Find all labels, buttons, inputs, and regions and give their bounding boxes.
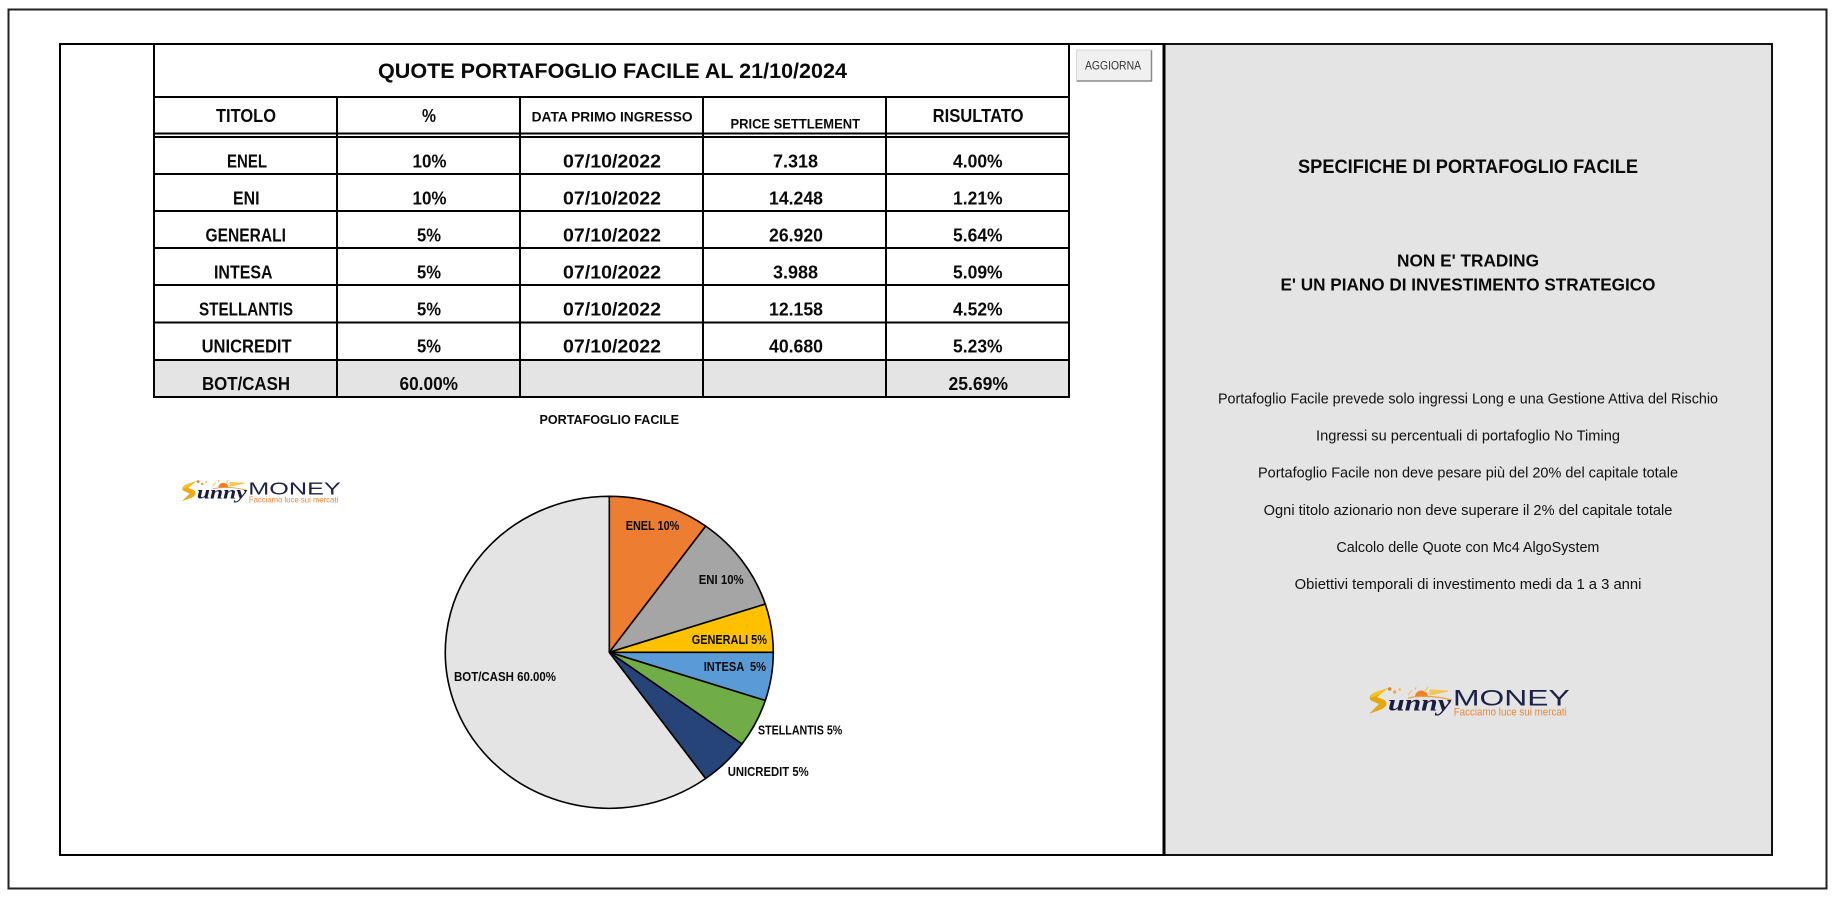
logo: Sunny Money, specifications panel bbox=[1369, 685, 1570, 718]
column headers bbox=[216, 106, 1024, 131]
row: GENERALI: 5% bbox=[417, 226, 441, 246]
subheading: strategic plan: NON E' TRADING bbox=[1397, 251, 1539, 271]
text block: portfolio rules bbox=[1218, 391, 1718, 593]
column headers: RISULTATO bbox=[933, 106, 1024, 126]
logo: Sunny Money, specifications panel: MONEY bbox=[1453, 685, 1570, 710]
row: STELLANTIS: 07/10/2022 bbox=[563, 300, 661, 320]
heading: specifications: SPECIFICHE DI PORTAFOGLIO FACILE bbox=[1298, 157, 1638, 178]
table: portfolio quotes bbox=[153, 44, 1070, 397]
pie labels: ENI 10% bbox=[699, 573, 744, 587]
text block: portfolio rules: Portafoglio Facile prevede solo ingressi Long e una Gestione Attiva del Rischio bbox=[1218, 391, 1718, 407]
text block: portfolio rules: Obiettivi temporali di investimento medi da 1 a 3 anni bbox=[1295, 577, 1641, 593]
row: STELLANTIS: STELLANTIS bbox=[199, 300, 293, 320]
total row background bbox=[154, 360, 1069, 397]
table title: QUOTE PORTAFOGLIO FACILE AL 21/10/2024 bbox=[378, 60, 847, 83]
row: UNICREDIT bbox=[202, 337, 1003, 357]
row: INTESA: 5.09% bbox=[953, 262, 1003, 282]
text block: portfolio rules: Calcolo delle Quote con Mc4 AlgoSystem bbox=[1336, 540, 1599, 556]
button: aggiorna bbox=[1076, 50, 1152, 81]
column headers: DATA PRIMO INGRESSO bbox=[532, 108, 693, 124]
row: ENI: 07/10/2022 bbox=[563, 188, 661, 208]
column headers: % bbox=[422, 106, 436, 126]
logo: Sunny Money, left panel: unny bbox=[197, 482, 248, 502]
row: ENI: 1.21% bbox=[953, 188, 1003, 208]
panel: specifications bbox=[1164, 43, 1772, 856]
button: aggiorna: AGGIORNA bbox=[1085, 60, 1141, 72]
row: UNICREDIT: 07/10/2022 bbox=[563, 337, 661, 357]
table grid bbox=[153, 44, 1070, 397]
row: INTESA: INTESA bbox=[214, 262, 272, 282]
column headers: PRICE SETTLEMENT bbox=[730, 115, 860, 131]
slice: BOT/CASH bbox=[445, 496, 706, 808]
row: STELLANTIS: 12.158 bbox=[769, 300, 823, 320]
text block: portfolio rules: Ogni titolo azionario non deve superare il 2% del capitale totale bbox=[1264, 503, 1672, 519]
chart title: PORTAFOGLIO FACILE bbox=[540, 412, 679, 427]
row: ENI: ENI bbox=[233, 188, 260, 208]
subheading: strategic plan: E' UN PIANO DI INVESTIMENTO STRATEGICO bbox=[1280, 274, 1656, 294]
slice: INTESA bbox=[609, 652, 773, 700]
slice: STELLANTIS bbox=[609, 652, 765, 744]
row: ENI bbox=[233, 188, 1003, 208]
pie labels: ENEL 10% bbox=[626, 519, 679, 533]
row: GENERALI: 26.920 bbox=[769, 226, 823, 246]
slice: ENI bbox=[609, 526, 765, 652]
row: ENEL: 10% bbox=[412, 152, 446, 172]
row: INTESA: 5% bbox=[417, 262, 441, 282]
column headers: TITOLO bbox=[216, 106, 276, 126]
row: ENEL bbox=[227, 152, 1003, 172]
slice: ENEL bbox=[609, 496, 706, 652]
row: INTESA bbox=[214, 262, 1003, 282]
row: BOT/CASH bbox=[202, 374, 1008, 394]
row: STELLANTIS: 4.52% bbox=[953, 300, 1003, 320]
row: UNICREDIT: 5% bbox=[417, 337, 441, 357]
row: UNICREDIT: 5.23% bbox=[953, 337, 1003, 357]
pie labels: UNICREDIT 5% bbox=[728, 765, 809, 779]
text block: portfolio rules: Ingressi su percentuali di portafoglio No Timing bbox=[1316, 429, 1620, 445]
row: INTESA: 07/10/2022 bbox=[563, 262, 661, 282]
row: GENERALI: 5.64% bbox=[953, 226, 1003, 246]
pie labels bbox=[454, 519, 842, 779]
row: STELLANTIS bbox=[199, 300, 1003, 320]
row: ENEL: 4.00% bbox=[953, 152, 1003, 172]
panel: left portfolio area bbox=[60, 44, 1164, 855]
row: ENI: 10% bbox=[412, 188, 446, 208]
row: ENEL: ENEL bbox=[227, 152, 267, 172]
slice: GENERALI bbox=[609, 604, 773, 652]
row: BOT/CASH: 60.00% bbox=[400, 374, 458, 394]
text block: portfolio rules: Portafoglio Facile non deve pesare più del 20% del capitale totale bbox=[1258, 466, 1678, 482]
row: BOT/CASH: 25.69% bbox=[948, 374, 1008, 394]
row: ENEL: 07/10/2022 bbox=[563, 152, 661, 172]
logo: Sunny Money, left panel: Facciamo luce sui mercati bbox=[249, 494, 338, 504]
pie chart: portfolio allocation bbox=[445, 496, 842, 808]
row: GENERALI: GENERALI bbox=[206, 226, 286, 246]
pie labels: INTESA 5% bbox=[704, 660, 766, 674]
pie labels: BOT/CASH 60.00% bbox=[454, 670, 556, 684]
row: UNICREDIT: 40.680 bbox=[769, 337, 823, 357]
row: BOT/CASH: BOT/CASH bbox=[202, 374, 290, 394]
subheading: strategic plan bbox=[1280, 251, 1656, 294]
slice: UNICREDIT bbox=[609, 652, 742, 778]
logo: Sunny Money, specifications panel: unny bbox=[1388, 690, 1452, 715]
row: ENEL: 7.318 bbox=[773, 152, 818, 172]
row: GENERALI: 07/10/2022 bbox=[563, 226, 661, 246]
pie labels: STELLANTIS 5% bbox=[758, 723, 842, 737]
row: UNICREDIT: UNICREDIT bbox=[202, 337, 292, 357]
row: ENI: 14.248 bbox=[769, 188, 823, 208]
logo: Sunny Money, left panel: MONEY bbox=[248, 478, 341, 498]
pie labels: GENERALI 5% bbox=[692, 633, 767, 647]
row: GENERALI bbox=[206, 226, 1003, 246]
row: STELLANTIS: 5% bbox=[417, 300, 441, 320]
row: INTESA: 3.988 bbox=[773, 262, 818, 282]
logo: Sunny Money, left panel bbox=[182, 478, 341, 504]
logo: Sunny Money, specifications panel: Facciamo luce sui mercati bbox=[1454, 706, 1567, 718]
